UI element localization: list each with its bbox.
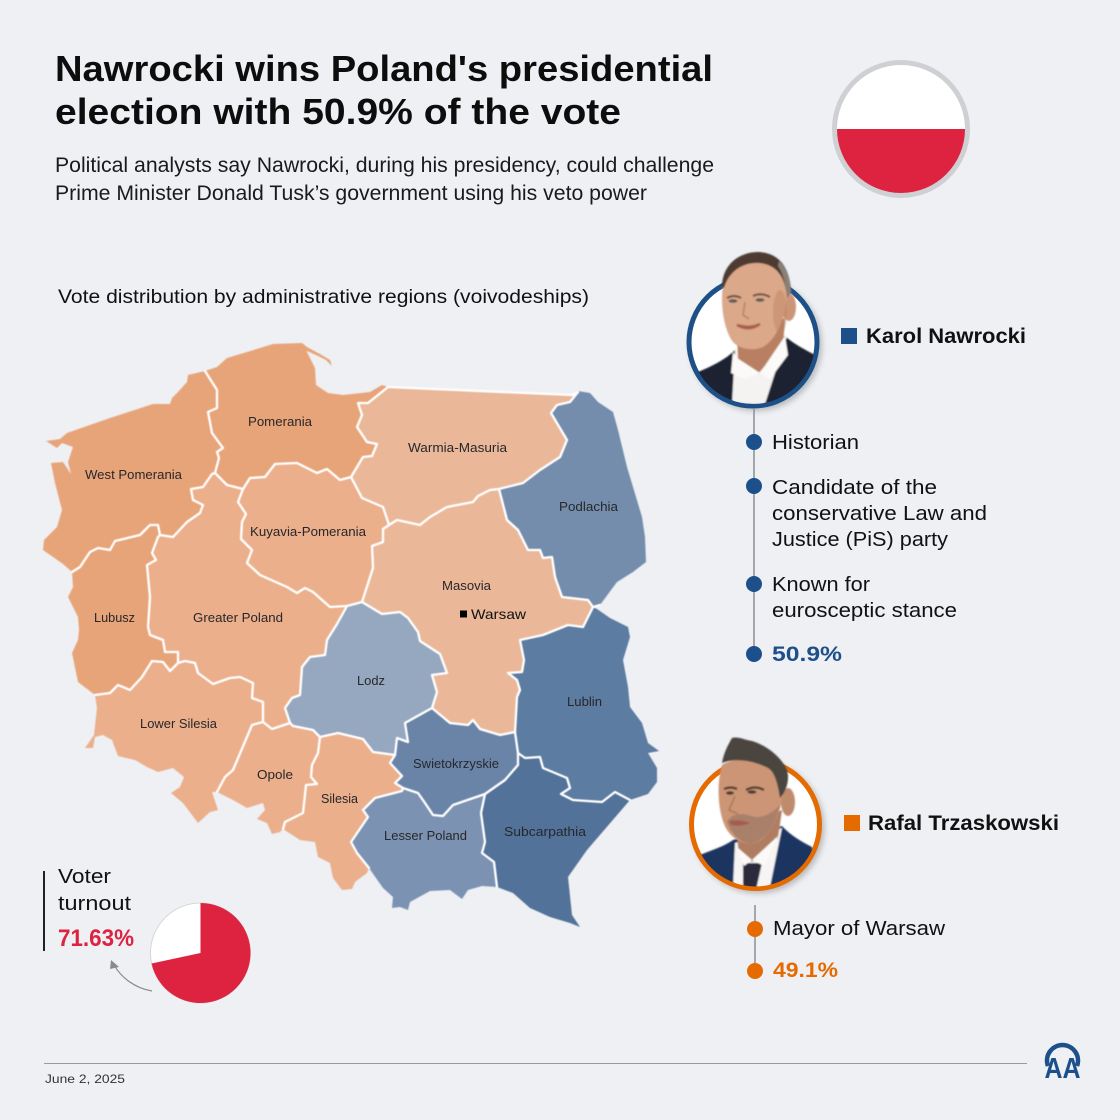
region: Lodz: Lodz bbox=[357, 673, 385, 688]
region: Lublin: Lublin bbox=[567, 694, 602, 709]
pie chart: voter turnout bbox=[150, 903, 250, 1003]
region: Silesia bbox=[283, 733, 403, 890]
portrait: Rafal Trzaskowski bbox=[692, 737, 824, 900]
region: Lesser Poland bbox=[351, 788, 497, 910]
region: Swietokrzyskie: Swietokrzyskie bbox=[413, 756, 499, 771]
region: Kuyavia-Pomerania bbox=[238, 463, 389, 607]
fact: historian: Historian bbox=[772, 432, 859, 454]
title bbox=[55, 48, 713, 132]
region: Greater Poland bbox=[147, 473, 347, 729]
title: Nawrocki wins Poland's presidential bbox=[55, 48, 713, 89]
region: Podlachia: Podlachia bbox=[559, 499, 619, 514]
voter turnout label: Voter bbox=[58, 866, 111, 888]
region: Masovia: Masovia bbox=[442, 578, 492, 593]
footer rule bbox=[44, 1062, 1027, 1064]
region: Lower Silesia: Lower Silesia bbox=[140, 716, 218, 731]
arrow: pie to turnout value bbox=[110, 960, 152, 991]
fact: stance: Known for bbox=[772, 574, 870, 596]
region: Lubusz bbox=[68, 525, 178, 695]
region: Warmia-Masuria bbox=[351, 387, 578, 525]
vote share: Trzaskowski: 49.1% bbox=[773, 959, 838, 982]
icon: Polish flag bbox=[832, 60, 970, 198]
subtitle bbox=[55, 153, 714, 205]
region: West Pomerania bbox=[43, 371, 223, 572]
region: Pomerania bbox=[205, 343, 388, 489]
region: Silesia: Silesia bbox=[321, 791, 359, 806]
timeline: Trzaskowski facts bbox=[747, 905, 946, 982]
region: Podlachia bbox=[499, 391, 646, 607]
region: Masovia bbox=[362, 489, 593, 735]
region: Lesser Poland: Lesser Poland bbox=[384, 828, 467, 843]
map heading: Vote distribution by administrative regions (voivodeships) bbox=[58, 286, 589, 308]
subtitle: Political analysts say Nawrocki, during his presidency, could challenge bbox=[55, 153, 714, 177]
region: Pomerania: Pomerania bbox=[248, 414, 313, 429]
vote share: Nawrocki: 50.9% bbox=[772, 643, 842, 666]
voter turnout label: turnout bbox=[58, 893, 132, 915]
fact: party: Justice (PiS) party bbox=[772, 529, 948, 551]
region: Kuyavia-Pomerania: Kuyavia-Pomerania bbox=[250, 524, 367, 539]
region: Opole bbox=[217, 722, 320, 834]
date: June 2, 2025 bbox=[45, 1072, 125, 1086]
icon: AA logo: AA bbox=[1044, 1053, 1081, 1085]
fact: mayor: Mayor of Warsaw bbox=[773, 918, 946, 940]
subtitle: Prime Minister Donald Tusk’s government using his veto power bbox=[55, 181, 647, 205]
vote share: Trzaskowski bbox=[747, 959, 838, 982]
region: Lublin bbox=[508, 607, 659, 802]
fact: party: conservative Law and bbox=[772, 503, 987, 525]
fact: party: Candidate of the bbox=[772, 477, 937, 499]
portrait: Karol Nawrocki bbox=[689, 252, 822, 420]
region: Warmia-Masuria: Warmia-Masuria bbox=[408, 440, 508, 455]
region: Swietokrzyskie bbox=[390, 708, 518, 816]
region: Subcarpathia: Subcarpathia bbox=[504, 824, 587, 839]
region: Opole: Opole bbox=[257, 767, 293, 782]
title: election with 50.9% of the vote bbox=[55, 91, 621, 132]
vote share: Nawrocki bbox=[746, 643, 842, 666]
region: West Pomerania: West Pomerania bbox=[85, 467, 183, 482]
fact: historian bbox=[746, 432, 859, 454]
voter turnout label bbox=[43, 866, 134, 952]
fact: stance bbox=[746, 574, 957, 622]
region: Lubusz: Lubusz bbox=[94, 610, 135, 625]
region: Subcarpathia bbox=[481, 753, 630, 927]
region: Lower Silesia bbox=[85, 661, 263, 823]
legend: Rafal Trzaskowski: Rafal Trzaskowski bbox=[868, 812, 1059, 835]
fact: stance: eurosceptic stance bbox=[772, 600, 957, 622]
voter turnout label: 71.63% bbox=[58, 925, 134, 952]
fact: party bbox=[746, 477, 987, 551]
region: Greater Poland: Greater Poland bbox=[193, 610, 283, 625]
map: Poland voivodeships bbox=[43, 343, 659, 927]
region: Lodz bbox=[285, 602, 447, 755]
legend: Karol Nawrocki: Karol Nawrocki bbox=[866, 325, 1026, 348]
timeline: Nawrocki facts bbox=[746, 408, 987, 666]
Warsaw marker: Warsaw bbox=[471, 606, 527, 622]
